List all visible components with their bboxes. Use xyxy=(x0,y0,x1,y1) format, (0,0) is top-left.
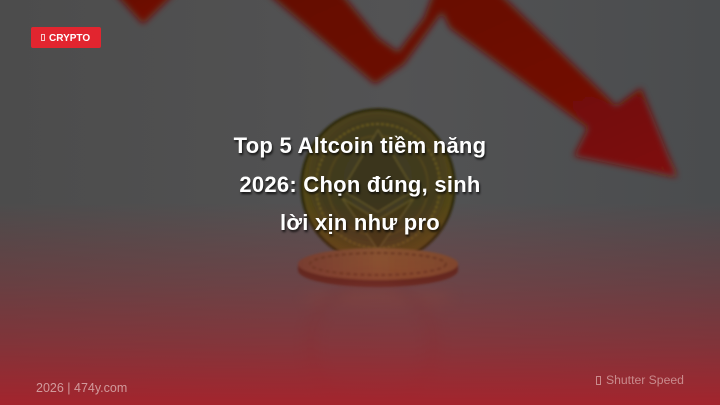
footer date and site: 2026 | 474y.com xyxy=(36,381,127,395)
title: lời xịn như pro xyxy=(280,210,440,235)
flat copper coin xyxy=(298,248,458,287)
title: 2026: Chọn đúng, sinh xyxy=(239,172,481,196)
title: Top 5 Altcoin tiềm năng xyxy=(234,133,486,158)
upright gold coin xyxy=(300,108,456,264)
photo credit: Shutter Speed xyxy=(606,373,684,387)
title xyxy=(234,133,487,238)
coin reflection xyxy=(302,283,454,405)
category badge: CRYPTO xyxy=(49,33,90,44)
falling red arrow xyxy=(112,0,677,177)
category badge xyxy=(31,27,101,48)
